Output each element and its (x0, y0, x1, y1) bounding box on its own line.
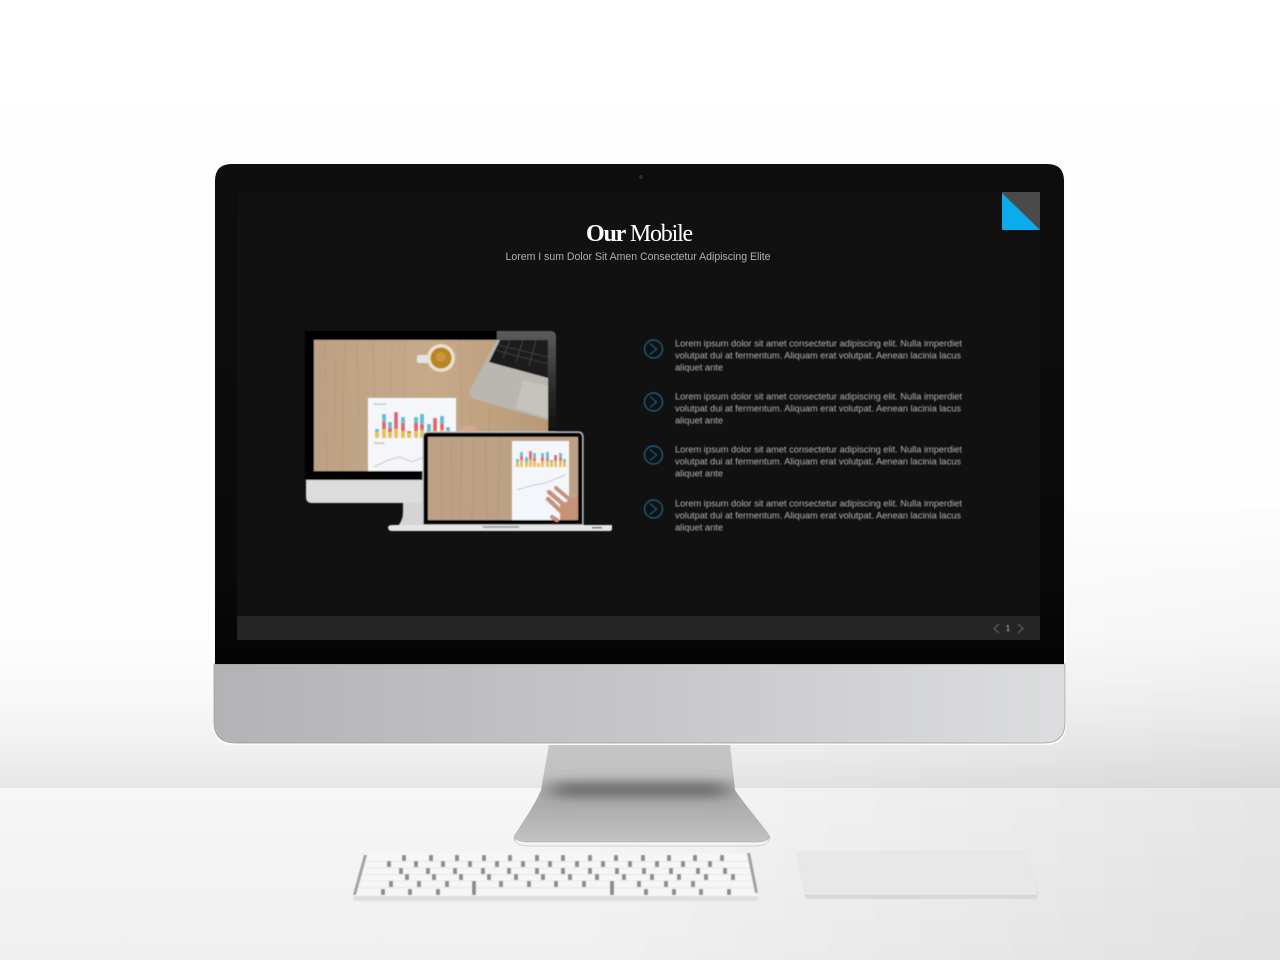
subtitle: Lorem I sum Dolor Sit Amen Consectetur Adipiscing Elite (506, 251, 770, 263)
bullet item 3: Lorem ipsum dolor sit amet consectetur adipiscing elit. Nulla imperdiet (675, 444, 963, 454)
bullet item 4: aliquet ante (675, 522, 723, 532)
hand peek (459, 426, 478, 431)
desktop mockup (305, 331, 612, 531)
laptop mockup (388, 432, 612, 531)
monitor black bezel (215, 164, 1064, 664)
laptop base (388, 525, 612, 531)
slide (237, 192, 1040, 901)
monitor chin (214, 664, 1065, 743)
bullet item 4: volutpat dui at fermentum. Aliquam erat volutpat. Aenean lacinia lacus (675, 510, 962, 520)
camera (639, 175, 643, 179)
desk photo (314, 340, 548, 471)
bullet item 2: volutpat dui at fermentum. Aliquam erat volutpat. Aenean lacinia lacus (675, 404, 962, 414)
device mockup (305, 331, 1023, 633)
slide background (237, 192, 1040, 640)
stand mockup (306, 480, 424, 503)
bullet item 3: aliquet ante (675, 468, 723, 478)
footer bar (237, 616, 1040, 640)
paper chart (368, 398, 456, 471)
pagination: 1 (1006, 624, 1011, 633)
bullet item 1: aliquet ante (675, 362, 723, 372)
pagination (994, 624, 1023, 633)
bullet item 3 (644, 444, 963, 478)
title: Our Mobile (586, 221, 693, 247)
bullet item 4: Lorem ipsum dolor sit amet consectetur adipiscing elit. Nulla imperdiet (675, 498, 963, 508)
desk surface (0, 788, 1280, 960)
monitor stand (514, 744, 770, 846)
trackpad (797, 852, 1038, 899)
coffee cup (417, 344, 455, 372)
monitor (213, 162, 1066, 846)
bullet item 1: Lorem ipsum dolor sit amet consectetur adipiscing elit. Nulla imperdiet (675, 338, 963, 348)
keyboard (353, 853, 758, 901)
bullet item 4 (644, 498, 963, 532)
monitor body outline (213, 162, 1066, 745)
bullet item 2: aliquet ante (675, 416, 723, 426)
paper chart: Monthly (374, 441, 385, 445)
bullet item 2: Lorem ipsum dolor sit amet consectetur adipiscing elit. Nulla imperdiet (675, 392, 963, 402)
paper chart: Revenue (374, 402, 386, 406)
bullet list (644, 338, 963, 532)
bullet item 1: volutpat dui at fermentum. Aliquam erat volutpat. Aenean lacinia lacus (675, 350, 962, 360)
hand (548, 488, 575, 520)
corner decoration (1002, 192, 1040, 230)
laptop photo (470, 340, 548, 420)
laptop screen photo (428, 437, 578, 520)
bullet item 2 (644, 392, 963, 426)
bullet item 1 (644, 338, 963, 372)
bullet item 3: volutpat dui at fermentum. Aliquam erat volutpat. Aenean lacinia lacus (675, 456, 962, 466)
